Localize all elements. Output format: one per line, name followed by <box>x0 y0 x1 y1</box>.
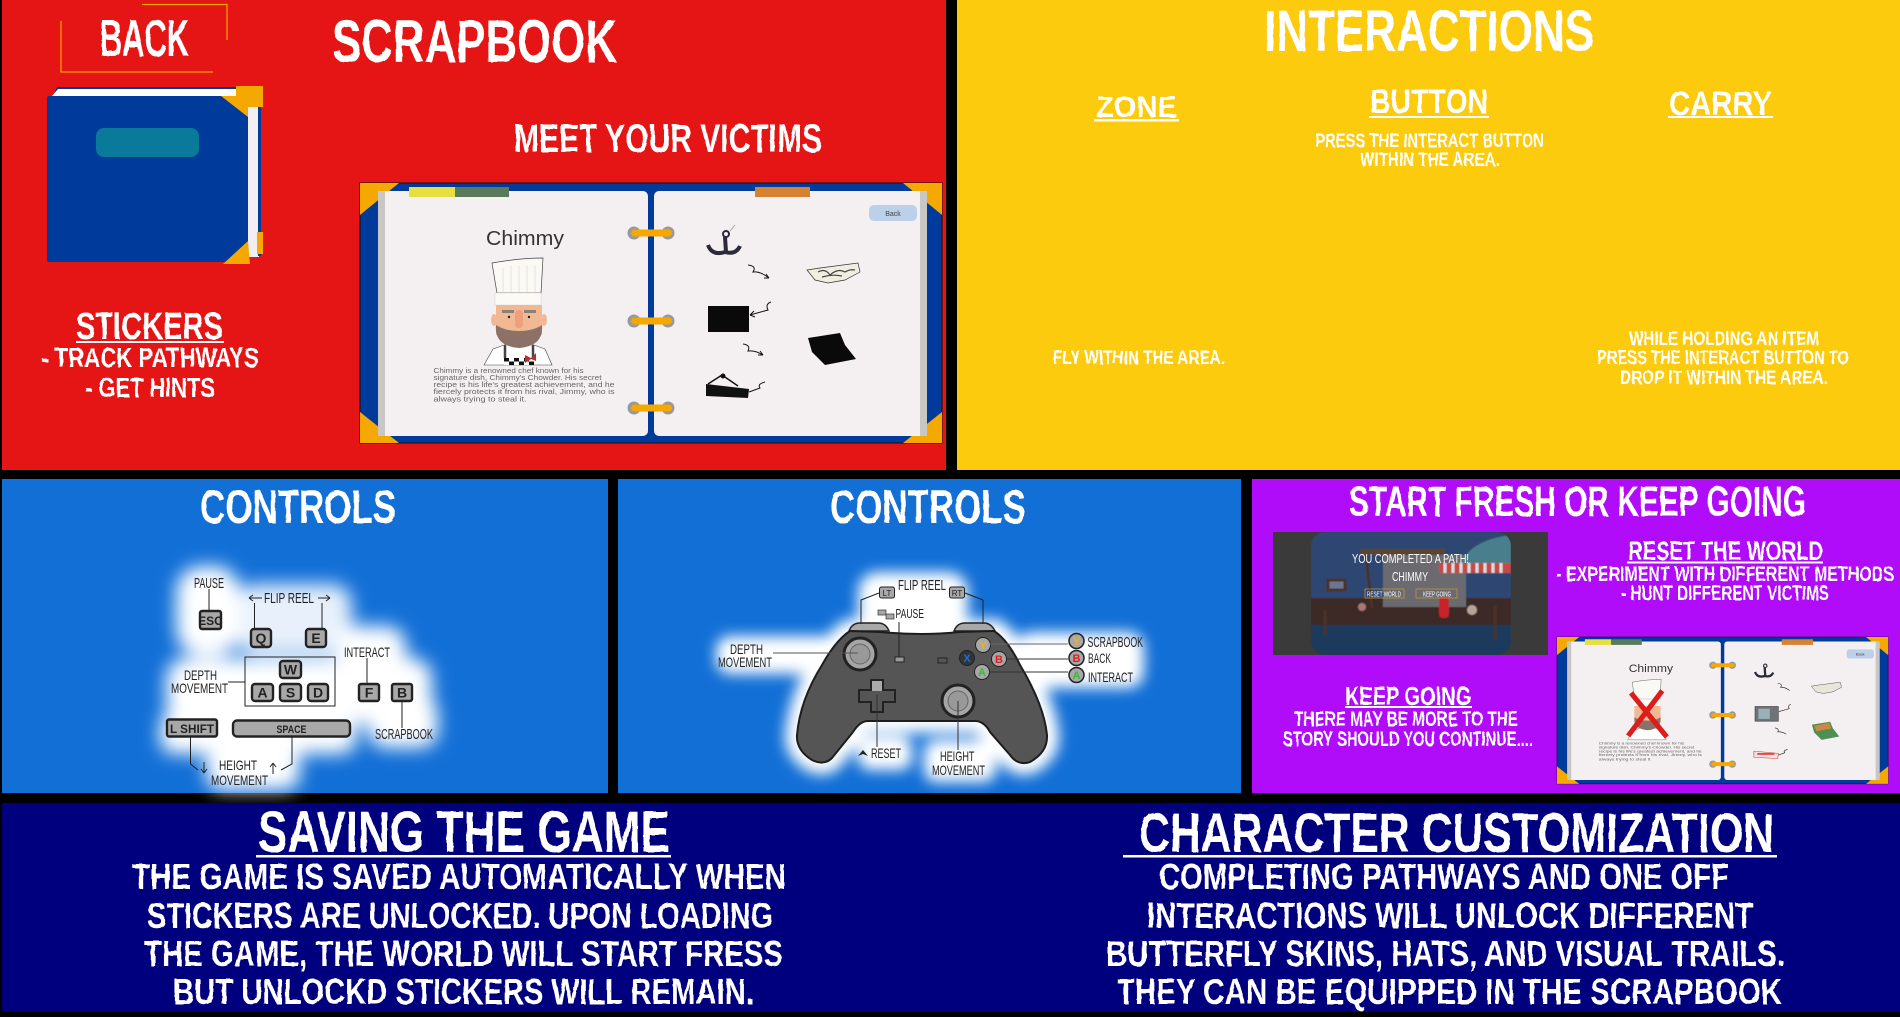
screenshot: open scrapbook: recipe is his life's greatest achievement, and he <box>434 382 615 389</box>
subheading: button: BUTTON <box>1370 83 1488 121</box>
wasd group: S <box>286 684 295 700</box>
game controller: X <box>963 653 971 665</box>
screenshot: open scrapbook: Chimmy is a renowned chef known for his <box>434 368 584 375</box>
wasd group: A <box>257 684 268 700</box>
label: scrapbook button: Y <box>1073 636 1081 648</box>
screenshot: you completed a path <box>1273 532 1548 655</box>
text: customization description <box>1106 856 1785 1012</box>
text: customization description: COMPLETING PATHWAYS AND ONE OFF <box>1159 856 1729 897</box>
text: saving description: THE GAME, THE WORLD WILL START FRESS <box>144 933 783 974</box>
label: interact <box>344 644 390 683</box>
label: back button: B <box>1073 653 1081 665</box>
back button: BACK <box>100 10 189 68</box>
game controller: B <box>995 654 1003 666</box>
screenshot: scrapbook with crossed out victim <box>1557 637 1888 784</box>
screenshot: scrapbook with crossed out victim: Back <box>1856 652 1865 657</box>
label: scrapbook button <box>990 634 1143 651</box>
screenshot: open scrapbook <box>360 183 942 443</box>
game controller: A <box>978 667 986 679</box>
text: carry description: WHILE HOLDING AN ITEM <box>1629 329 1819 350</box>
heading: controls controller: CONTROLS <box>830 480 1026 533</box>
label: height movement: HEIGHT <box>940 748 975 764</box>
key: f <box>359 684 379 701</box>
text: button description: PRESS THE INTERACT BUTTON <box>1315 131 1544 152</box>
key: f: F <box>365 684 374 700</box>
panel: start fresh or keep going <box>1252 478 1900 793</box>
label: depth movement: DEPTH <box>184 667 217 683</box>
text: saving description: STICKERS ARE UNLOCKED. UPON LOADING <box>147 895 773 936</box>
screenshot: scrapbook with crossed out victim: signature dish, Chimmy's Chowder. His secret <box>1599 744 1695 749</box>
label: height movement: MOVEMENT <box>932 762 985 778</box>
label: flip reel triggers: LT <box>883 589 891 598</box>
label: pause: PAUSE <box>896 606 924 621</box>
label: depth movement: DEPTH <box>730 641 763 657</box>
key: b <box>392 684 412 701</box>
text: zone description: FLY WITHIN THE AREA. <box>1053 348 1225 369</box>
screenshot: open scrapbook: Chimmy <box>486 228 564 250</box>
panel: keyboard controls <box>2 479 608 793</box>
text: keep going description: THERE MAY BE MORE TO THE <box>1294 708 1518 731</box>
subheading: keep going: KEEP GOING <box>1345 681 1471 711</box>
heading: controls keyboard: CONTROLS <box>200 480 396 533</box>
text: track pathways: - TRACK PATHWAYS <box>41 342 259 373</box>
text: reset bullets: - HUNT DIFFERENT VICTIMS <box>1621 582 1829 605</box>
screenshot: scrapbook with crossed out victim: fiercely protects it from his rival, Jimmy, who is <box>1599 752 1702 757</box>
panel: interactions <box>957 0 1900 470</box>
label: depth movement <box>718 641 858 670</box>
back button <box>61 4 227 72</box>
panel: saving and customization <box>2 800 1900 1012</box>
panel: scrapbook <box>2 0 946 470</box>
screenshot: scrapbook with crossed out victim: recipe is his life's greatest achievement, and he <box>1599 748 1703 753</box>
label: back button: BACK <box>1088 650 1111 666</box>
text: keep going description: STORY SHOULD YOU CONTINUE.... <box>1283 728 1533 751</box>
panel: controller controls <box>618 479 1241 793</box>
subheading: carry: CARRY <box>1669 85 1772 123</box>
heading: saving the game: SAVING THE GAME <box>258 800 670 865</box>
label: depth movement: MOVEMENT <box>171 680 228 696</box>
label: depth movement: MOVEMENT <box>718 654 772 670</box>
label: flip reel triggers: RT <box>952 589 962 598</box>
key: space: SPACE <box>276 724 306 736</box>
key: e: E <box>311 630 321 646</box>
wasd group <box>245 657 335 706</box>
text: customization description: INTERACTIONS WILL UNLOCK DIFFERENT <box>1147 895 1753 936</box>
subheading: reset the world: RESET THE WORLD <box>1628 536 1823 566</box>
label: flip reel: FLIP REEL <box>264 590 314 607</box>
label: height movement: HEIGHT <box>219 757 257 773</box>
text: reset bullets <box>1556 563 1894 605</box>
heading: meet your victims: MEET YOUR VICTIMS <box>514 117 822 161</box>
key: q: Q <box>256 630 267 646</box>
screenshot: open scrapbook: signature dish, Chimmy's Chowder. His secret <box>434 375 602 382</box>
screenshot: you completed a path: CHIMMY <box>1392 569 1428 584</box>
label: height movement <box>932 701 985 778</box>
label: reset <box>858 695 901 761</box>
wasd group: D <box>313 684 323 700</box>
label: interact button <box>989 668 1133 685</box>
screenshot: you completed a path: RESET WORLD <box>1367 592 1401 598</box>
text: carry description <box>1597 329 1849 389</box>
wasd group: W <box>284 662 298 678</box>
key: l shift: L SHIFT <box>170 722 215 736</box>
label: depth movement <box>171 667 245 696</box>
label: flip reel triggers <box>861 577 983 624</box>
text: saving description: THE GAME IS SAVED AUTOMATICALLY WHEN <box>132 856 786 897</box>
label: flip reel triggers: FLIP REEL <box>898 577 946 594</box>
label: height movement <box>190 737 292 788</box>
key: q <box>251 629 271 647</box>
key: b: B <box>397 684 407 700</box>
label: scrapbook button: SCRAPBOOK <box>1088 634 1143 651</box>
heading: interactions: INTERACTIONS <box>1264 0 1594 64</box>
text: carry description: DROP IT WITHIN THE AREA. <box>1620 368 1828 389</box>
text: get hints: - GET HINTS <box>85 372 215 403</box>
label: pause: PAUSE <box>194 575 224 592</box>
label: interact button: INTERACT <box>1088 669 1133 685</box>
screenshot: scrapbook with crossed out victim: Chimmy is a renowned chef known for his <box>1599 740 1684 745</box>
screenshot: scrapbook with crossed out victim: Chimmy <box>1629 663 1673 675</box>
screenshot: scrapbook with crossed out victim: always trying to steal it. <box>1599 756 1652 761</box>
screenshot: open scrapbook: fiercely protects it from his rival, Jimmy, who is <box>434 389 615 396</box>
screenshot: open scrapbook: Back <box>885 211 901 218</box>
key: space <box>233 720 350 736</box>
text: saving description: BUT UNLOCKD STICKERS WILL REMAIN. <box>173 971 754 1012</box>
label: interact button: A <box>1073 670 1081 682</box>
screenshot: you completed a path: KEEP GOING <box>1423 592 1451 598</box>
heading: stickers: STICKERS <box>76 306 223 348</box>
label: back button <box>1006 650 1111 666</box>
label: flip reel <box>249 590 330 628</box>
game controller: Y <box>979 640 987 652</box>
label: interact: INTERACT <box>344 644 390 660</box>
heading: scrapbook: SCRAPBOOK <box>332 8 617 75</box>
label: scrapbook <box>375 702 433 743</box>
label: height movement: MOVEMENT <box>211 772 268 788</box>
keyboard diagram <box>167 575 433 788</box>
text: saving description <box>132 856 786 1012</box>
text: keep going description <box>1283 708 1533 751</box>
game controller <box>797 623 1047 763</box>
label: scrapbook: SCRAPBOOK <box>375 726 433 743</box>
subheading: zone: ZONE <box>1096 91 1177 124</box>
icon: closed scrapbook <box>47 86 263 264</box>
text: button description: WITHIN THE AREA. <box>1360 150 1500 171</box>
label: pause <box>878 606 924 657</box>
key: esc: ESC <box>198 614 223 628</box>
label: reset: RESET <box>871 745 901 761</box>
key: e <box>306 629 326 647</box>
screenshot: you completed a path: YOU COMPLETED A PATH! <box>1352 551 1469 566</box>
screenshot: open scrapbook: always trying to steal it. <box>434 396 527 404</box>
text: button description <box>1315 131 1544 171</box>
